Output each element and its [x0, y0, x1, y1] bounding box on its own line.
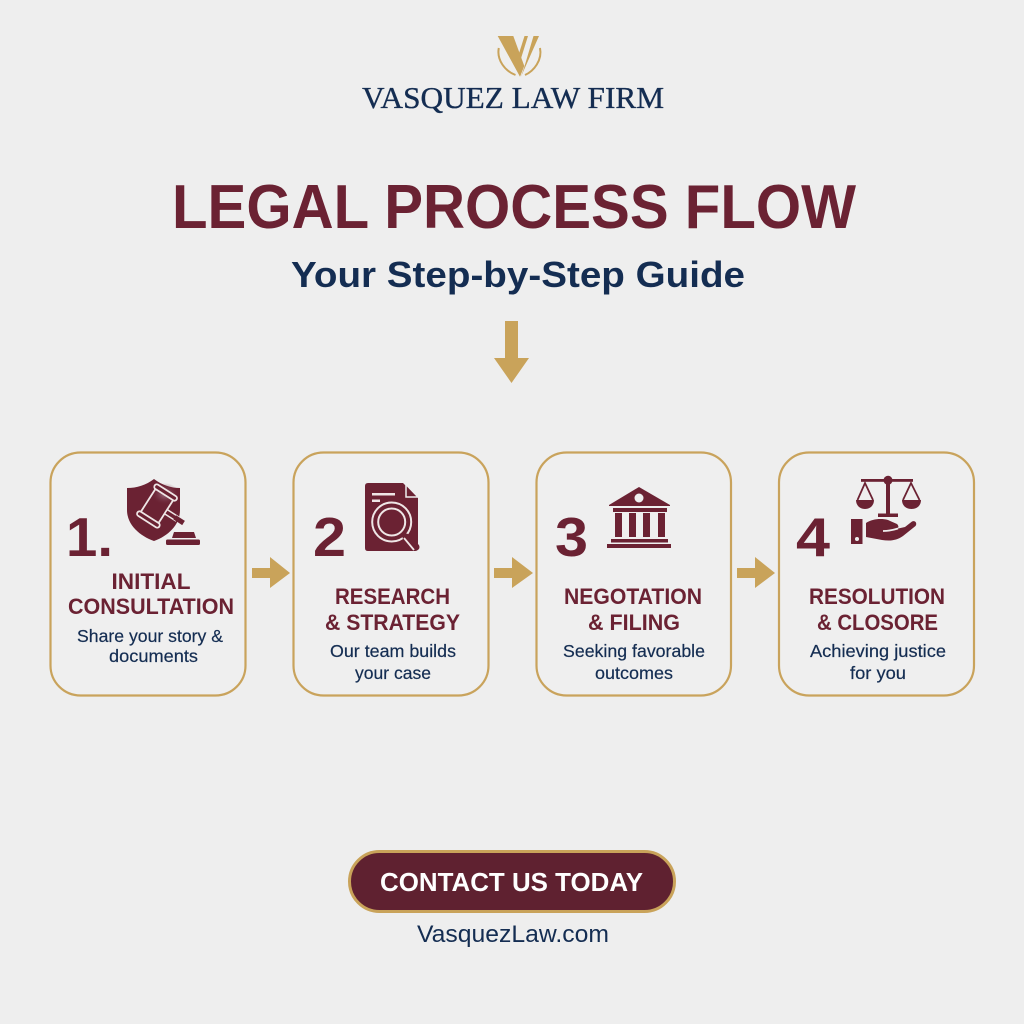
website url: VasquezLaw.com: [417, 921, 609, 948]
panel: step 1 initial consultation: documents: [109, 646, 198, 666]
panel: step 3 negotiation and filing: [536, 452, 731, 696]
step description: Our team builds: [330, 641, 456, 661]
step description: Seeking favorable: [563, 641, 705, 661]
arrow: step 3 to 4: [737, 557, 775, 588]
panel: step 4 resolution and closure: [779, 452, 974, 696]
icon: gold V monogram: [498, 36, 540, 77]
icon: document and magnifier: [365, 483, 418, 551]
panel: step 2 research and strategy: your case: [355, 663, 431, 683]
panel: step 4 resolution and closure: & CLOSORE: [817, 610, 938, 635]
step number 3: 3: [555, 506, 588, 568]
panel: step 3 negotiation and filing: & FILING: [588, 610, 680, 635]
step number 2: 2: [313, 506, 346, 568]
logo: Vasquez Law Firm: [362, 36, 664, 115]
icon: shield and gavel: [127, 479, 200, 545]
arrow: down: [494, 321, 529, 383]
subtitle: Your Step-by-Step Guide: [291, 254, 745, 295]
button: contact us today: CONTACT US TODAY: [380, 867, 643, 897]
step heading: INITIAL: [112, 569, 190, 594]
arrow: step 2 to 3: [494, 557, 533, 588]
step description: Achieving justice: [810, 641, 946, 661]
panel: step 4 resolution and closure: for you: [850, 663, 906, 683]
panel: step 2 research and strategy: [294, 452, 488, 696]
step number 4: 4: [796, 506, 830, 568]
panel: step 1 initial consultation: [50, 452, 246, 696]
title: LEGAL PROCESS FLOW: [172, 173, 856, 242]
step heading: RESEARCH: [335, 584, 450, 609]
icon: scales on open hand: [851, 476, 921, 544]
button: contact us today: [350, 852, 674, 912]
arrow: step 1 to 2: [252, 557, 290, 588]
panel: step 2 research and strategy: & STRATEGY: [325, 610, 460, 635]
panel: step 3 negotiation and filing: outcomes: [595, 663, 673, 683]
step number 1: 1.: [66, 506, 113, 568]
icon: courthouse: [607, 487, 671, 548]
step description: Share your story &: [77, 626, 223, 646]
step heading: RESOLUTION: [809, 584, 945, 609]
step heading: NEGOTATION: [564, 584, 702, 609]
firm name: VASQUEZ LAW FIRM: [362, 80, 664, 115]
panel: step 1 initial consultation: CONSULTATION: [68, 594, 234, 619]
